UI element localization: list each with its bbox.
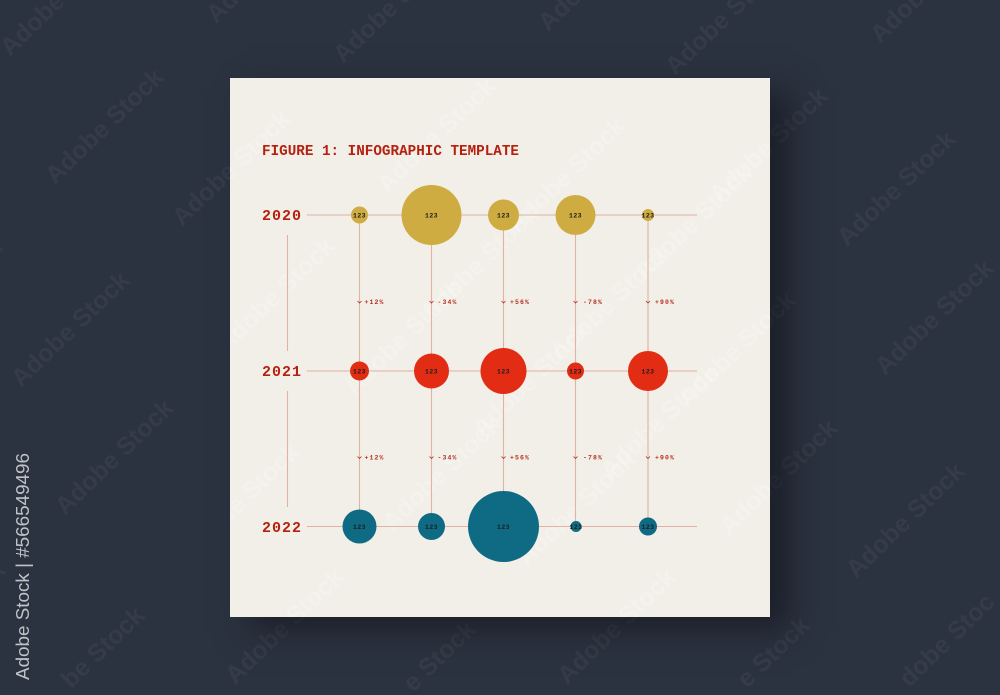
watermarks on card: Adobe Stock	[545, 240, 674, 366]
watermarks on background: dobe Stoc	[894, 588, 1000, 692]
row 2020: gold bubbles: 123	[642, 212, 654, 219]
title: FIGURE 1: INFOGRAPHIC TEMPLATE	[262, 143, 519, 160]
change labels 2021 to 2022	[358, 454, 675, 462]
change labels 2021 to 2022: -78%	[583, 454, 603, 462]
watermarks on card: Adobe Stock	[672, 286, 801, 412]
row 2020: gold bubbles	[351, 185, 654, 245]
row 2022: teal bubbles: 123	[497, 524, 510, 531]
watermarks on card: Adobe Stock	[714, 414, 843, 540]
watermarks on card: Adobe Stock	[704, 82, 833, 208]
watermarks on card: Adobe Stock	[595, 358, 724, 484]
change labels 2021 to 2022: +90%	[655, 454, 675, 462]
watermarks on card: Adobe Stock	[552, 563, 681, 689]
change labels 2021 to 2022: +12%	[364, 454, 385, 462]
watermarks on background: Adobe Stock	[167, 105, 296, 231]
watermarks on card: Adobe Stock	[176, 438, 305, 564]
row 2021: red bubbles: 123	[353, 368, 366, 375]
change labels 2021 to 2022: -34%	[438, 454, 458, 462]
row 2022: teal bubbles	[342, 491, 657, 562]
change labels 2021 to 2022: +56%	[510, 454, 530, 462]
row 2021: red bubbles: 123	[425, 368, 438, 375]
watermarks on background: e Stock	[732, 611, 815, 693]
watermarks on background: Adobe Stock	[220, 563, 349, 689]
watermarks on card: Adobe Stock	[502, 112, 631, 238]
row 2021: red bubbles: 123	[569, 368, 582, 375]
watermarks on background: Adobe Stock	[704, 82, 833, 208]
watermarks on background: be Stock	[56, 601, 150, 694]
row 2021: red bubbles: 123	[642, 368, 654, 375]
row 2020: gold bubbles: 123	[353, 212, 366, 219]
row 2020: gold bubbles: 123	[569, 212, 582, 219]
year label 2022: 2022	[262, 520, 302, 537]
watermarks on background: Adobe Stock	[870, 254, 999, 380]
row 2020: gold bubbles: 123	[497, 212, 510, 219]
watermarks on card: Adobe Stock	[211, 232, 340, 358]
watermarks on background: e Stock	[398, 615, 481, 695]
change labels 2020 to 2021: +56%	[510, 299, 530, 306]
change labels 2020 to 2021: -78%	[583, 299, 603, 306]
change labels 2020 to 2021: +90%	[655, 299, 675, 306]
axis connector lines	[286, 235, 288, 507]
watermarks on background: Adobe Stock	[50, 394, 179, 520]
year label 2020: 2020	[262, 208, 302, 225]
panel: infographic card	[230, 78, 770, 617]
watermarks on card	[342, 200, 666, 562]
watermarks on background: Adobe Stock	[552, 563, 681, 689]
watermarks on background: Adobe Stock	[841, 457, 970, 583]
year axis	[262, 208, 302, 537]
watermarks on card: Adobe Stock	[372, 72, 501, 198]
stock id side text: Adobe Stock | #566549496	[12, 453, 33, 680]
row 2022: teal bubbles: 123	[353, 524, 366, 531]
watermarks on background: Adobe Stock	[832, 125, 961, 251]
watermarks on card: Adobe Stock	[220, 563, 349, 689]
watermarks on card: Adobe Stock	[377, 410, 506, 536]
change labels 2020 to 2021: -34%	[438, 299, 458, 306]
watermarks on card: Adobe Stock	[467, 316, 596, 442]
row 2021: red bubbles: 123	[497, 368, 510, 375]
watermarks on background: Adobe Stock	[40, 63, 169, 189]
row 2022: teal bubbles: 123	[425, 524, 438, 531]
row 2022: teal bubbles: 123	[570, 524, 582, 531]
change labels 2020 to 2021: +12%	[364, 299, 385, 306]
watermarks on background: Adobe Stock	[714, 414, 843, 540]
watermarks on card: Adobe Stock	[167, 105, 296, 231]
watermarks on card: Adobe Stock	[339, 274, 468, 400]
grid lines	[307, 215, 697, 526]
change labels 2020 to 2021	[358, 299, 675, 306]
row 2020: gold bubbles: 123	[425, 212, 438, 219]
year label 2021: 2021	[262, 364, 302, 381]
watermarks on background: Adobe Stock	[6, 266, 135, 392]
row 2022: teal bubbles: 123	[642, 524, 654, 531]
watermarks on card: Adobe Stock	[512, 445, 641, 571]
row 2021: red bubbles	[350, 348, 668, 394]
watermarks on background: Adobe Stock	[672, 286, 801, 412]
watermarks on card: Adobe Stock	[415, 200, 544, 326]
watermarks on card: Adobe Stock	[629, 159, 758, 285]
